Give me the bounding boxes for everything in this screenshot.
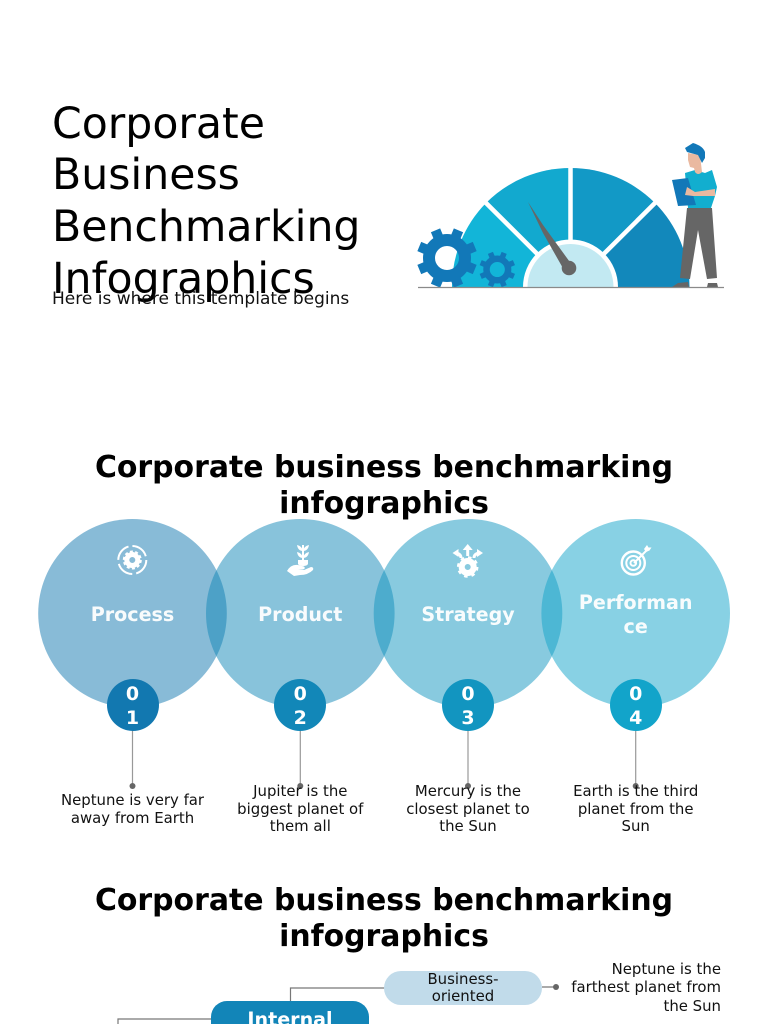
icon: strategy gear with arrows	[452, 544, 483, 576]
heading: section 1: Corporate business benchmarking	[95, 450, 673, 485]
description 01	[61, 791, 204, 827]
circle: product	[206, 519, 395, 708]
icon: large gear	[408, 219, 486, 297]
pill: business-oriented: oriented	[432, 987, 494, 1005]
description 03: the Sun	[439, 817, 497, 835]
heading: section 2	[95, 883, 673, 954]
number badge 02	[274, 679, 326, 731]
description 01: Neptune is very far	[61, 791, 204, 809]
description: neptune: Neptune is the	[612, 960, 721, 978]
label: product: Product	[258, 603, 342, 626]
icon: small gear	[474, 246, 521, 293]
heading: section 2: Corporate business benchmarking	[95, 883, 673, 918]
description: neptune	[571, 960, 721, 1014]
pill: business-oriented: Business-	[427, 970, 499, 988]
pill: business-oriented	[384, 970, 542, 1005]
description 03: Mercury is the	[415, 782, 521, 800]
icon: product plant in hand	[287, 545, 313, 576]
circle: performance	[541, 519, 730, 708]
heading: section 1: infographics	[279, 486, 489, 521]
icon: process gear	[118, 546, 146, 574]
baseline	[418, 286, 724, 288]
number badge 03	[442, 679, 494, 731]
title: Infographics	[52, 254, 315, 304]
icon: performance target	[622, 545, 652, 574]
label: performance	[579, 591, 692, 638]
description 04: Sun	[622, 817, 650, 835]
person	[672, 143, 718, 287]
label: strategy: Strategy	[421, 603, 515, 626]
number badge 02: 2	[294, 706, 307, 728]
heading: section 1	[95, 450, 673, 521]
description 01: away from Earth	[71, 809, 194, 827]
description 02: biggest planet of	[237, 800, 363, 818]
circle: process	[38, 519, 227, 708]
heading: section 2: infographics	[279, 919, 489, 954]
description 02: Jupiter is the	[253, 782, 347, 800]
connectors	[130, 730, 639, 789]
number badge 03: 3	[461, 706, 475, 728]
number badge 01: 0	[126, 683, 139, 705]
label: process: Process	[91, 603, 174, 626]
gauge dial	[452, 160, 690, 287]
number badge 04: 4	[629, 706, 642, 728]
description 03	[406, 782, 530, 835]
number badge 03: 0	[461, 683, 475, 705]
circle: strategy	[374, 519, 562, 708]
needle	[528, 202, 576, 275]
description: neptune: farthest planet from	[571, 978, 721, 996]
title: Benchmarking	[52, 202, 360, 252]
label: performance: Performan	[579, 591, 692, 614]
description 04: Earth is the third	[573, 782, 698, 800]
box: internal	[211, 1001, 369, 1024]
number badge 01: 1	[126, 706, 139, 728]
illustration: gauge with gears and person	[417, 143, 724, 288]
title	[52, 98, 360, 304]
title: Business	[52, 150, 240, 200]
subtitle: Here is where this template begins	[52, 289, 349, 309]
label: performance: ce	[624, 614, 648, 638]
title: Corporate	[52, 98, 265, 148]
description 02: them all	[270, 817, 331, 835]
number badge 04	[610, 679, 662, 731]
number badge 04: 0	[629, 683, 642, 705]
description 03: closest planet to	[406, 800, 530, 818]
description 04: planet from the	[578, 800, 694, 818]
tree connectors	[117, 984, 559, 1024]
number badge 02: 0	[294, 683, 307, 705]
number badge 01	[106, 679, 158, 731]
description 04	[573, 782, 698, 835]
cover below baseline	[410, 288, 730, 300]
description: neptune: the Sun	[664, 996, 721, 1014]
description 02	[237, 782, 364, 835]
venn circles row	[38, 519, 730, 789]
